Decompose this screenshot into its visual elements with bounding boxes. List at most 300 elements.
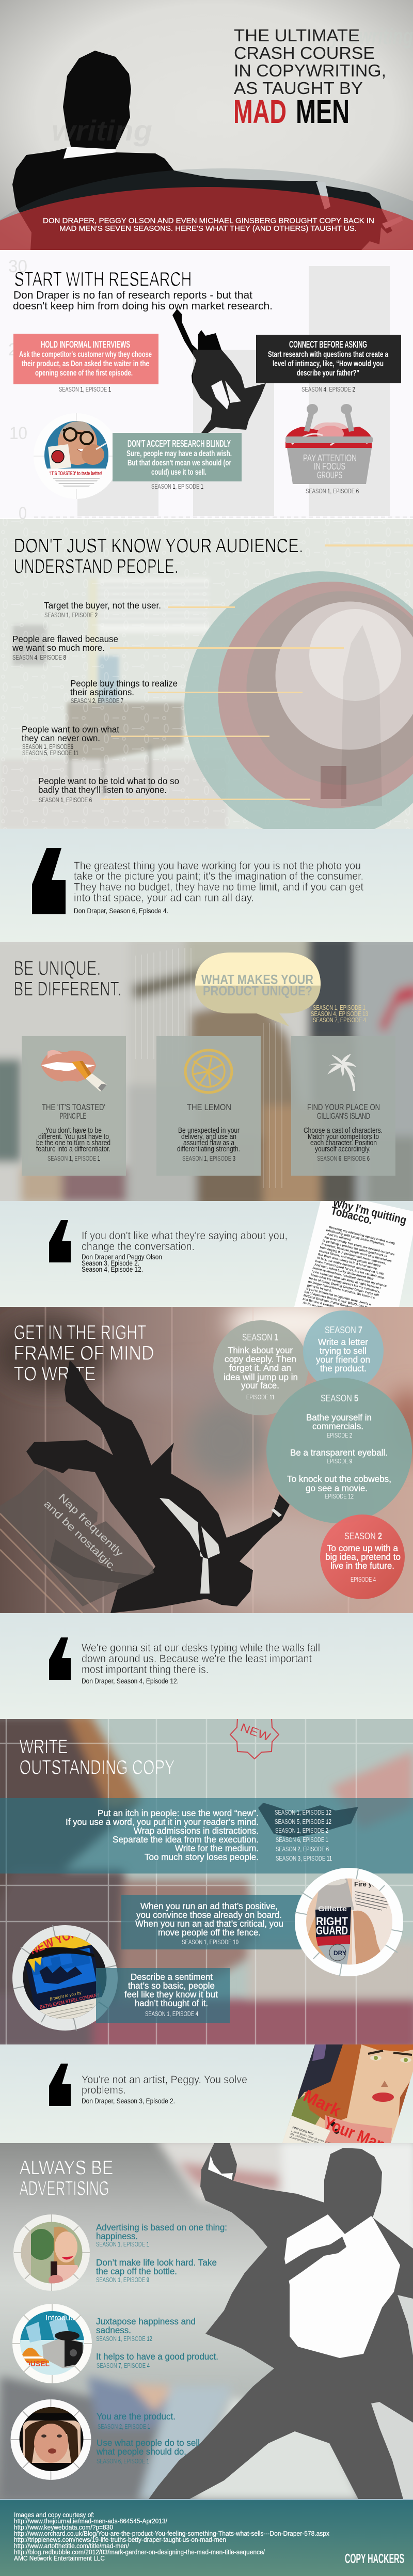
list of copy rules: Put an itch in people: use the word “new”.	[98, 1808, 259, 1818]
speech bubble	[195, 953, 321, 1026]
bar chart: 30	[8, 257, 27, 276]
ad page: why I'm quitting tobacco: to peddling a product for which good work is	[322, 1239, 388, 1258]
heading: understand people	[13, 535, 303, 577]
shirt front	[284, 2214, 400, 2358]
insight: own what they can never own: SEASON 5, EPISODE 11	[22, 750, 78, 757]
tip: good product	[96, 2351, 218, 2369]
research background	[0, 250, 413, 519]
quote text	[82, 2074, 247, 2096]
circle photo: Lucky Strike ad: 'IT'S TOASTED' to taste better!	[50, 471, 102, 477]
card body: feature into a differentiator.	[36, 1145, 110, 1153]
list of episode labels: SEASON 6, EPISODE 1	[276, 1836, 328, 1844]
circle photo: Right Guard ad: RIGHT	[316, 1915, 348, 1928]
card: don't accept research blindly	[113, 433, 242, 481]
card body: yourself accordingly.	[315, 1145, 371, 1153]
tip: juxtapose: SEASON 1, EPISODE 12	[96, 2335, 152, 2343]
nap panel with rotated text: Nap frequently	[56, 1492, 125, 1559]
panel: footer credits	[0, 2499, 413, 2576]
quote attribution: Don Draper and Peggy Olson	[82, 1253, 162, 1261]
card: hold informal interviews	[13, 334, 158, 384]
list of episode labels	[275, 1809, 332, 1862]
ad page: why I'm quitting tobacco: relationship with Lucky Strike Cigarettes.	[326, 1229, 386, 1247]
circle photo: Kodak Carousel	[12, 2304, 92, 2383]
insight: told what to do: SEASON 1, EPISODE 6	[39, 797, 92, 804]
bubble: season 5: SEASON 5	[321, 1393, 358, 1403]
circle photo: Right Guard ad: Gillette	[318, 1904, 347, 1913]
tip: based on happiness: Advertising is based on one thing:	[96, 2222, 227, 2232]
hero subtitle	[43, 216, 374, 233]
ad page: why I'm quitting tobacco: business elsewhere, I realized: here was my chance	[312, 1267, 387, 1288]
footer divider	[0, 2499, 413, 2500]
quote text: most important thing there is.	[82, 1664, 209, 1676]
ad page: why I'm quitting tobacco: For over twenty-five years, we devoted ourselves	[324, 1236, 395, 1257]
card title	[42, 1102, 105, 1121]
bubble: season 7: the product.	[320, 1363, 367, 1373]
ad page: why I'm quitting tobacco: knew it wasn't good for us, but we couldn't stop.	[315, 1260, 385, 1280]
icon: focus group basket	[285, 404, 373, 484]
magazine: mark your man: elit, sed diam nonummy nibh euismod	[290, 2133, 336, 2150]
quote background	[0, 829, 413, 942]
nap panel with rotated text: and be nostalgic.	[42, 1498, 119, 1573]
tip: you are the product: You are the product.	[97, 2411, 176, 2422]
tip: don't make life look hard: SEASON 1, EPISODE 9	[96, 2276, 149, 2284]
bubble: season 5: EPISODE 12	[325, 1493, 354, 1500]
heading: get in the right frame of mind: GET IN THE RIGHT	[13, 1321, 146, 1344]
card body: different. You just have to	[38, 1133, 109, 1141]
image and copy credits: http://blog.redbubble.com/2012/03/mark-gardner-on-designing-the-mad-men-title-sequence/	[14, 2549, 265, 2556]
card: connect before asking: describe your father?”	[297, 369, 359, 378]
photo backdrop	[0, 2143, 413, 2499]
heading: write outstanding copy: WRITE	[19, 1736, 68, 1758]
icon: lemon	[185, 1050, 232, 1092]
ad page: why I'm quitting tobacco: list of agencies that do it well: BBDO, Leo Burnett,	[304, 1291, 377, 1312]
icon: quote mark	[49, 2064, 71, 2106]
tile grid lines	[0, 1719, 413, 2044]
image and copy credits: http://www.orchard.co.uk/Blog/You-are-the-product-You-feeling-something-Thats-what-sells---Don-Draper-578.aspx	[14, 2530, 330, 2537]
bubble: season 1: forget it. And an	[229, 1363, 291, 1373]
concentric target circles	[184, 571, 413, 841]
bubble: season 5: commercials.	[312, 1421, 363, 1431]
cuff	[208, 2156, 233, 2180]
insight: aspirations	[70, 678, 178, 705]
callout: describe a sentiment: Describe a sentiment	[131, 1972, 213, 1982]
bar chart: 10	[9, 424, 27, 443]
title: MAD	[233, 93, 287, 130]
ad page: why I'm quitting tobacco	[294, 1194, 413, 1324]
nap panel with rotated text	[0, 1469, 154, 1613]
quote background	[0, 1613, 413, 1719]
callout: positive vs critical ads: When you run an ad that’s critical, you	[135, 1918, 283, 1929]
figure: Don Draper silhouette from behind	[12, 51, 403, 250]
callout: positive vs critical ads	[121, 1895, 301, 1949]
intro text	[13, 289, 273, 312]
ad page: why I'm quitting tobacco: And I'm relieved.	[327, 1233, 352, 1242]
list of episode labels: SEASON 3, EPISODE 11	[276, 1855, 332, 1862]
episode labels: SEASON 7, EPISODE 4	[313, 1017, 366, 1024]
quote text: take or the picture you paint; it's the imagination of the consumer.	[74, 870, 363, 882]
circle photo: Right Guard ad: Fire yours...	[354, 1880, 392, 1888]
hero background	[0, 0, 413, 250]
quote text: If you don't like what they're saying about you,	[82, 1230, 288, 1242]
panel: quote four	[0, 2044, 413, 2155]
lower right gap in silhouette	[371, 2402, 413, 2499]
bubble: season 2	[320, 1515, 405, 1599]
heading: understand people: DON'T JUST KNOW YOUR AUDIENCE.	[13, 535, 303, 557]
bubble: season 2: To come up with a	[327, 1543, 398, 1553]
list of copy rules: Too much story loses people.	[145, 1852, 259, 1862]
cigarette	[382, 216, 403, 229]
bar chart: 20	[8, 340, 27, 360]
panel: quote two	[0, 1194, 413, 1324]
intro text: doesn't keep him from doing his own market research.	[13, 300, 273, 312]
quote text: into that space, your ad can run all day.	[74, 892, 254, 904]
circle photo: Right Guard ad	[295, 1868, 403, 1976]
heading: write outstanding copy	[19, 1736, 174, 1778]
quote attribution: Season 3, Episode 2.	[82, 1259, 139, 1267]
icon: new starburst: NEW	[239, 1721, 272, 1743]
magazine: mark your man: Your Man	[321, 2113, 388, 2155]
grey ellipse	[0, 168, 413, 228]
magazine: mark your man: Lorem ipsum dolor sit amet, consectetur	[291, 2130, 340, 2148]
tip: use what people do: Use what people do to sell	[97, 2438, 200, 2448]
panel: be unique	[0, 935, 413, 1209]
heading: understand people: UNDERSTAND PEOPLE.	[13, 555, 178, 577]
panel: hero	[0, 0, 413, 250]
ad page: why I'm quitting tobacco: So as of today, Sterling Cooper Draper Pryce will	[309, 1277, 379, 1297]
circle photo: Kodak Carousel: ak	[22, 2314, 30, 2322]
list of copy rules: If you use a word, you put it in your reader’s mind.	[66, 1817, 259, 1827]
ad page: why I'm quitting tobacco: from buying it. A product that never improves,	[320, 1246, 386, 1266]
episode label: SEASON 6, EPISODE 6	[317, 1155, 370, 1162]
panel: write outstanding copy	[0, 1710, 413, 2051]
panel: know your audience	[0, 519, 413, 841]
heading: always be advertising	[19, 2157, 113, 2199]
circle photo: man with headset	[10, 2399, 91, 2480]
circle photo: New York steel poster: NEW YORK	[28, 1923, 87, 1958]
card title: THE LEMON	[187, 1102, 231, 1112]
tip: use what people do: SEASON 6, EPISODE 1	[97, 2458, 149, 2465]
magazine: mark your man: ut laoreet dolore magna aliquam erat	[289, 2135, 334, 2153]
bubble: season 1: copy deeply. Then	[225, 1354, 296, 1364]
quote text	[74, 860, 363, 904]
curtain stripes	[135, 948, 282, 1188]
ad page: why I'm quitting tobacco: no longer take tobacco accounts. We know it's	[308, 1281, 375, 1300]
episode label: SEASON 1, EPISODE 1	[47, 1155, 100, 1162]
footer background	[0, 2499, 413, 2576]
callout: describe a sentiment: feel like they know it but	[124, 1989, 218, 2000]
bubble: season 5: Be a transparent eyeball.	[290, 1447, 388, 1458]
circle photo: Betty with Coca-Cola	[13, 2214, 90, 2291]
title: MEN	[296, 93, 350, 130]
episode labels	[311, 1004, 368, 1024]
bubble: season 1: your face.	[241, 1380, 279, 1391]
bubble: season 5: go see a movie.	[306, 1483, 368, 1493]
ad page: why I'm quitting tobacco: McCann Erickson, Cutler Gleason and Chaough,	[303, 1294, 373, 1315]
card title: PRINCIPLE	[60, 1111, 86, 1121]
tip: use what people do: what people should do.	[96, 2446, 186, 2457]
ad page: why I'm quitting tobacco: and Benton & Bowles.	[303, 1298, 335, 1308]
callout: describe a sentiment: SEASON 1, EPISODE 4	[145, 2010, 198, 2018]
shirt	[160, 1498, 210, 1594]
bubble: season 7: Write a letter	[318, 1337, 368, 1347]
tip: use what people do	[96, 2438, 200, 2465]
bubble: season 2: live in the future.	[330, 1560, 394, 1571]
heading: always be advertising: ADVERTISING	[19, 2177, 109, 2199]
black splat	[258, 1803, 358, 1838]
card body: You don't have to be	[45, 1127, 102, 1135]
tip: juxtapose: Juxtapose happiness and	[96, 2316, 196, 2327]
bubble: season 5: To knock out the cobwebs,	[287, 1474, 391, 1484]
tip: juxtapose: sadness.	[96, 2325, 131, 2335]
quote attribution	[82, 1253, 162, 1273]
quote background	[0, 1201, 413, 1307]
insight: told what to do	[38, 776, 179, 804]
hero subtitle: MAD MEN'S SEVEN SEASONS. HERE'S WHAT THEY (AND OTHERS) TAUGHT US.	[59, 224, 357, 233]
callout: describe a sentiment: hadn’t thought of it.	[135, 1998, 208, 2008]
wall panel stripes	[45, 1307, 348, 1613]
episode label: SEASON 4, EPISODE 2	[301, 386, 355, 393]
bubble: season 5	[266, 1378, 412, 1523]
card body: assumed flaw as a	[183, 1139, 235, 1147]
card: hold informal interviews: HOLD INFORMAL INTERVIEWS	[41, 339, 130, 350]
red ellipse	[0, 187, 413, 337]
ad page: why I'm quitting tobacco: If you're interested in cigarette work, here's a	[306, 1287, 371, 1306]
ad page: why I'm quitting tobacco: causes illness, and makes people unhappy.	[319, 1250, 382, 1268]
insight: people are flawed	[12, 634, 118, 661]
tip: you are the product	[97, 2411, 176, 2430]
bubble: season 1: SEASON 1	[242, 1332, 278, 1342]
list of copy rules: Write for the medium.	[175, 1843, 259, 1853]
card title: FIND YOUR PLACE ON	[307, 1102, 380, 1112]
icon: quote mark	[49, 1220, 71, 1262]
insight: told what to do: People want to be told what to do so	[38, 776, 179, 786]
tip: good product: It helps to have a good product.	[96, 2351, 218, 2362]
bubble: season 7: SEASON 7	[325, 1325, 362, 1335]
bubble: season 5: Bathe yourself in	[306, 1412, 372, 1423]
bar chart	[0, 257, 413, 523]
audience background	[0, 519, 413, 829]
blurred figure shapes	[0, 1715, 413, 2051]
card body: Match your competitors to	[308, 1133, 379, 1141]
card: hold informal interviews: their product, as Don asked the waiter in the	[22, 360, 149, 368]
wallpaper pattern	[0, 519, 413, 829]
icon: quote mark	[32, 848, 66, 914]
hero subtitle: DON DRAPER, PEGGY OLSON AND EVEN MICHAEL GINSBERG BROUGHT COPY BACK IN	[43, 216, 374, 225]
card body: each character. Position	[310, 1139, 377, 1147]
tip: based on happiness	[96, 2222, 227, 2248]
insight: own what they can never own	[22, 724, 119, 757]
leader lines	[101, 544, 413, 800]
bubble: season 5: EPISODE 2	[327, 1432, 352, 1439]
card: don't accept research blindly: Sure, people may have a death wish.	[126, 449, 232, 458]
card: gilligan's island	[291, 1036, 395, 1176]
watermark: copywriting: writing	[52, 114, 152, 147]
ad page: why I'm quitting tobacco: In fact, our entire business depended on it. We	[317, 1257, 385, 1276]
icon: palm tree	[327, 1054, 357, 1091]
image and copy credits: http://www.thejournal.ie/mad-men-ads-864545-Apr2013/	[14, 2518, 168, 2525]
heading: be unique: BE UNIQUE.	[13, 957, 101, 979]
episode labels: SEASON 1, EPISODE 1	[313, 1004, 366, 1011]
icon: quote mark	[49, 1637, 71, 1680]
photo backdrop	[0, 1307, 413, 1613]
heading: get in the right frame of mind	[13, 1321, 154, 1385]
card: connect before asking	[256, 335, 401, 383]
insight: aspirations: People buy things to realize	[70, 678, 178, 689]
speech bubble: WHAT MAKES YOUR	[201, 972, 313, 987]
bubble: season 7	[303, 1310, 384, 1391]
circle photo: Kodak Carousel: Introduc	[45, 2314, 75, 2322]
list of copy rules: Wrap admissions in distractions.	[134, 1825, 259, 1836]
card: don't accept research blindly: DON'T ACCEPT RESEARCH BLINDLY	[128, 439, 231, 449]
heading: get in the right frame of mind: FRAME OF MIND	[13, 1342, 154, 1364]
insight: own what they can never own: People want to own what	[22, 724, 119, 735]
quote attribution: Don Draper, Season 3, Episode 2.	[82, 2097, 175, 2105]
quote text: problems.	[82, 2084, 126, 2096]
heading: be unique	[13, 957, 121, 1000]
insight: told what to do: badly that they'll listen to anyone.	[38, 785, 167, 795]
panel: always be advertising	[0, 2138, 413, 2500]
callout: positive vs critical ads: SEASON 1, EPISODE 10	[182, 1939, 239, 1946]
card body: Choose a cast of characters.	[304, 1127, 383, 1135]
image and copy credits: http://tripplenews.com/news/19-life-truths-betty-draper-taught-us-on-mad-men	[14, 2536, 226, 2543]
blurred photo backdrop	[0, 935, 413, 1209]
quote background	[0, 2044, 413, 2143]
heading: start with research: START WITH RESEARCH	[14, 268, 192, 290]
bar chart: 0	[19, 504, 27, 523]
bubble: season 1: Think about your	[228, 1345, 293, 1355]
bubble: season 2: big idea, pretend to	[325, 1552, 401, 1562]
ad page: why I'm quitting tobacco: As for us, we're not sorry.	[303, 1301, 340, 1314]
image and copy credits: Images and copy courtesy of:	[14, 2511, 94, 2519]
card: hold informal interviews: opening scene of the first episode.	[35, 369, 133, 378]
falling man silhouette	[26, 1360, 290, 1613]
image and copy credits: AMC Network Entertainment LLC	[14, 2555, 105, 2562]
callout: positive vs critical ads: When you run an ad that’s positive,	[140, 1901, 278, 1911]
tile photo backdrop	[0, 1719, 413, 2044]
icon: focus group basket: IN FOCUS	[314, 461, 345, 472]
quote text	[82, 1642, 320, 1676]
quote text: The greatest thing you have working for you is not the photo you	[74, 860, 361, 872]
card title: THE 'IT'S TOASTED'	[42, 1102, 105, 1112]
insight: people are flawed: we want so much more.	[12, 643, 105, 653]
quote text: They have no budget, they have no time limit, and if you can get	[74, 881, 363, 893]
quote text: down around us. Because we're the least important	[82, 1653, 312, 1665]
bubble: season 7: your friend on	[316, 1354, 370, 1365]
bubble: season 5: EPISODE 9	[327, 1458, 352, 1465]
bubble: season 7: trying to sell	[320, 1346, 367, 1356]
card title	[307, 1102, 380, 1121]
insight: target the buyer	[44, 600, 161, 619]
ad page: why I'm quitting tobacco: Recently, my advertising agency ended a long	[329, 1226, 395, 1245]
circle photo: New York steel poster: BETHLEHEM STEEL COMPANY	[39, 1992, 100, 2010]
insight: people are flawed: People are flawed because	[12, 634, 118, 644]
quote text: You're not an artist, Peggy. You solve	[82, 2074, 247, 2086]
quote attribution: Don Draper, Season 6, Episode 4.	[74, 907, 168, 915]
panel: quote one	[0, 829, 413, 942]
card: don't accept research blindly: could) use it to sell.	[151, 468, 206, 477]
image and copy credits	[14, 2511, 330, 2562]
tip: don't make life look hard: the cap off the bottle.	[96, 2266, 177, 2276]
tip: juxtapose	[96, 2316, 196, 2343]
tip: you are the product: SEASON 2, EPISODE 1	[98, 2423, 150, 2430]
insight: aspirations: SEASON 2, EPISODE 7	[71, 697, 123, 705]
icon: lips with cigarette	[41, 1050, 107, 1091]
heading: be unique: BE DIFFERENT.	[13, 978, 121, 1000]
heading: always be advertising: ALWAYS BE	[19, 2157, 113, 2179]
insight: target the buyer: SEASON 1, EPISODE 2	[44, 612, 98, 619]
episode label: SEASON 1, EPISODE 1	[151, 483, 203, 490]
episode label: SEASON 1, EPISODE 1	[59, 386, 111, 393]
title	[233, 26, 386, 130]
ad page: why I'm quitting tobacco: And then, when Lucky Strike moved their	[314, 1263, 374, 1281]
bubble: season 2: SEASON 2	[344, 1531, 382, 1541]
circle photo: Lucky Strike ad	[34, 413, 120, 499]
card: hold informal interviews: Ask the competitor's customer why they choose	[19, 350, 152, 359]
title: CRASH COURSE	[234, 43, 375, 63]
tip: don't make life look hard: Don’t make life look hard. Take	[96, 2257, 217, 2268]
card title: GILLIGAN'S ISLAND	[317, 1111, 370, 1121]
episode label: SEASON 1, EPISODE 6	[306, 488, 359, 495]
heading: get in the right frame of mind: TO WRITE	[13, 1363, 96, 1385]
right side gap in silhouette	[398, 2295, 413, 2355]
insight: aspirations: their aspirations.	[70, 687, 134, 697]
list of episode labels: SEASON 1, EPISODE 2	[275, 1827, 328, 1834]
callout: describe a sentiment	[96, 1968, 230, 2023]
ad page: why I'm quitting tobacco: to be someone who can sleep at night because I	[311, 1270, 381, 1290]
ad page: why I'm quitting tobacco: know what I'm selling doesn't kill my customers.	[310, 1274, 380, 1294]
man silhouette with raised arm	[149, 2143, 413, 2499]
ad page: why I'm quitting tobacco: But there was money in it. A lot of money.	[317, 1253, 378, 1271]
tip: good product: SEASON 7, EPISODE 4	[97, 2362, 150, 2369]
collar	[63, 147, 116, 159]
callout: describe a sentiment: that’s so basic, people	[128, 1980, 215, 1991]
quote text: We're gonna sit at our desks typing while the walls fall	[82, 1642, 320, 1654]
title: THE ULTIMATE	[234, 26, 360, 45]
bubble: season 2: EPISODE 4	[351, 1576, 376, 1583]
card: don't accept research blindly: But that doesn't mean we should (or	[128, 459, 231, 467]
ad page: why I'm quitting tobacco: Tobacco.	[330, 1204, 374, 1227]
magazine: mark your man: FINE ROSE RED	[292, 2126, 314, 2136]
necktie	[284, 2237, 346, 2283]
card body: Be unexpected in your	[178, 1127, 240, 1135]
insight: people are flawed: SEASON 4, EPISODE 8	[12, 654, 66, 661]
speech bubble: PRODUCT UNIQUE?	[203, 983, 312, 998]
intro text: Don Draper is no fan of research reports - but that	[13, 289, 252, 301]
image and copy credits: http://www.artofthetitle.com/title/mad-men/	[14, 2542, 129, 2550]
quote attribution: Season 4, Episode 12.	[82, 1266, 143, 1273]
icon: new starburst	[230, 1710, 279, 1759]
card body: differentiating strength.	[177, 1145, 240, 1153]
blurred office shapes	[0, 2138, 413, 2500]
quote text: change the conversation.	[82, 1241, 195, 1253]
image and copy credits: http://www.keywebdata.com/?p=830	[14, 2524, 113, 2531]
quote attribution: Don Draper, Season 4, Episode 12.	[82, 1677, 179, 1685]
blurred eye and glow	[0, 1299, 413, 1606]
list of episode labels: SEASON 1, EPISODE 12	[275, 1809, 331, 1816]
card body: delivery, and use an	[181, 1133, 236, 1141]
cuff	[316, 182, 330, 210]
card: connect before asking: CONNECT BEFORE ASKING	[289, 339, 367, 350]
bubble: season 1: idea will jump up in	[224, 1372, 298, 1382]
falling man silhouette	[172, 309, 274, 438]
quote text	[82, 1230, 288, 1253]
panel: quote three	[0, 1613, 413, 1719]
circle photo: Kodak Carousel: ROUSEL	[20, 2360, 50, 2368]
list of episode labels: SEASON 2, EPISODE 6	[276, 1846, 329, 1853]
magazine: mark your man	[279, 2044, 413, 2155]
insight: target the buyer: Target the buyer, not the user.	[44, 600, 161, 611]
card body	[36, 1127, 110, 1153]
